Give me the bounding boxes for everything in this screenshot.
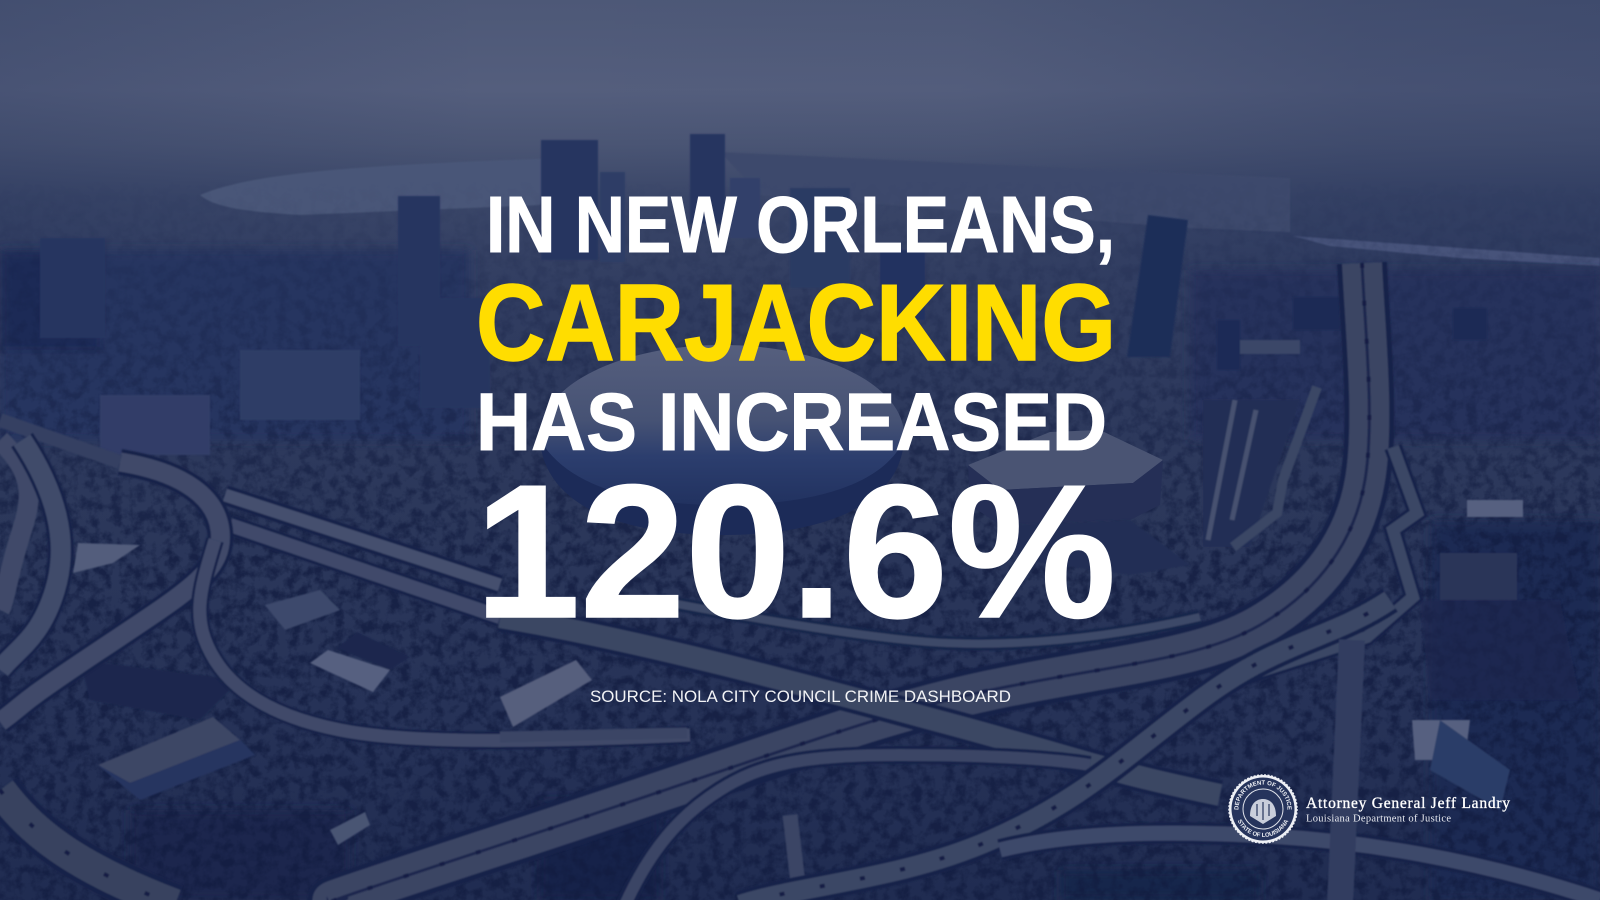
road: upper overpass <box>656 600 1200 644</box>
downtown skyline <box>40 134 1487 455</box>
headline line 1: IN NEW ORLEANS, <box>486 180 1115 269</box>
arena <box>968 430 1190 575</box>
department name: Louisiana Department of Justice <box>1306 814 1451 824</box>
road: crossing down-right <box>500 617 1220 795</box>
organisation name: Attorney General Jeff Landry <box>1306 795 1510 812</box>
road: ramp west <box>500 733 687 737</box>
road: lower right flyover <box>740 600 1390 900</box>
interstate highways <box>0 263 1600 900</box>
icon: department of justice seal: DEPARTMENT OF JUSTICE <box>1234 780 1292 810</box>
road: ramp centre <box>625 755 1090 900</box>
source line: SOURCE: NOLA CITY COUNCIL CRIME DASHBOARD <box>590 688 1011 706</box>
road: right branches <box>1233 447 1417 680</box>
headline line 2: highlighted word: CARJACKING <box>476 262 1116 384</box>
rail yard <box>1203 400 1300 547</box>
big statistic: 120.6% <box>475 446 1116 658</box>
road: bottom left <box>0 790 175 900</box>
headline line 3: HAS INCREASED <box>476 377 1107 468</box>
river <box>200 152 1600 266</box>
logo: attorney general <box>1228 774 1510 844</box>
road: left loop <box>0 462 220 722</box>
road: bottom right flyover <box>1000 833 1600 900</box>
icon: department of justice seal: STATE OF LOUISIANA <box>1238 820 1288 837</box>
headline <box>475 180 1116 658</box>
superdome <box>540 345 904 535</box>
icon: department of justice seal <box>1228 774 1298 844</box>
road: main interstate, right side <box>330 263 1369 900</box>
city haze blocks <box>0 250 1600 900</box>
lots and buildings <box>73 500 1580 845</box>
texture: city detail <box>0 258 1600 900</box>
